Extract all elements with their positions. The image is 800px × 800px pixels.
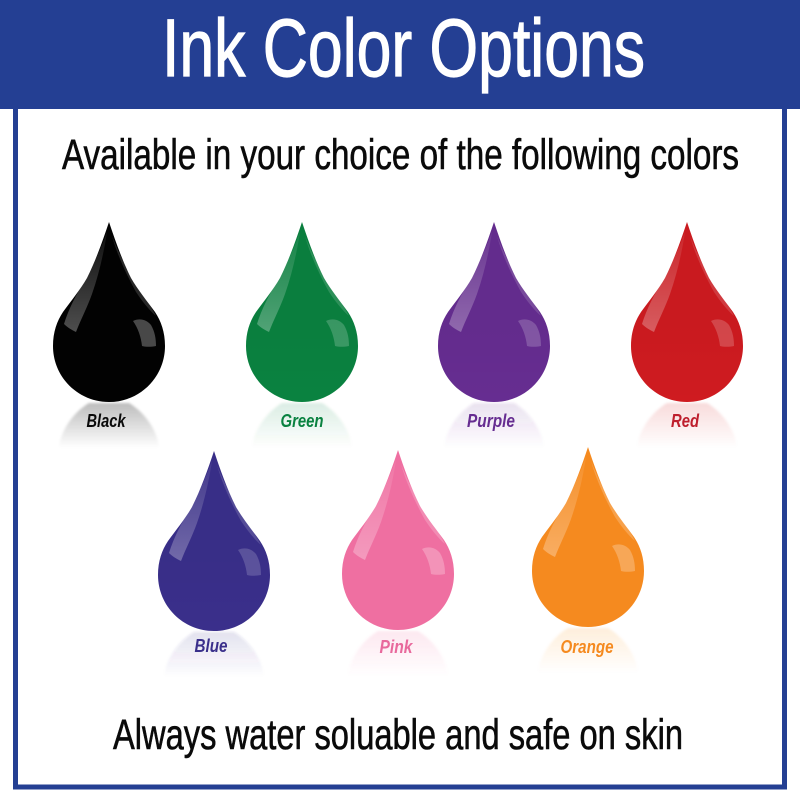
drop: black [53, 222, 165, 448]
drop: black: Black [86, 411, 126, 431]
drop: orange [532, 447, 644, 673]
title banner [0, 0, 800, 109]
drop: purple [438, 222, 550, 448]
drop: orange: Orange [560, 637, 614, 657]
drop: blue [158, 451, 270, 677]
drop: green [246, 222, 358, 448]
drop: green: Green [280, 411, 324, 431]
title: Ink Color Options [162, 3, 645, 94]
drop: pink [342, 450, 454, 676]
drop: red: Red [671, 411, 700, 431]
drop: red [631, 222, 743, 448]
drop: purple: Purple [467, 411, 515, 431]
drop: blue: Blue [194, 636, 228, 656]
drop: pink: Pink [380, 637, 413, 657]
